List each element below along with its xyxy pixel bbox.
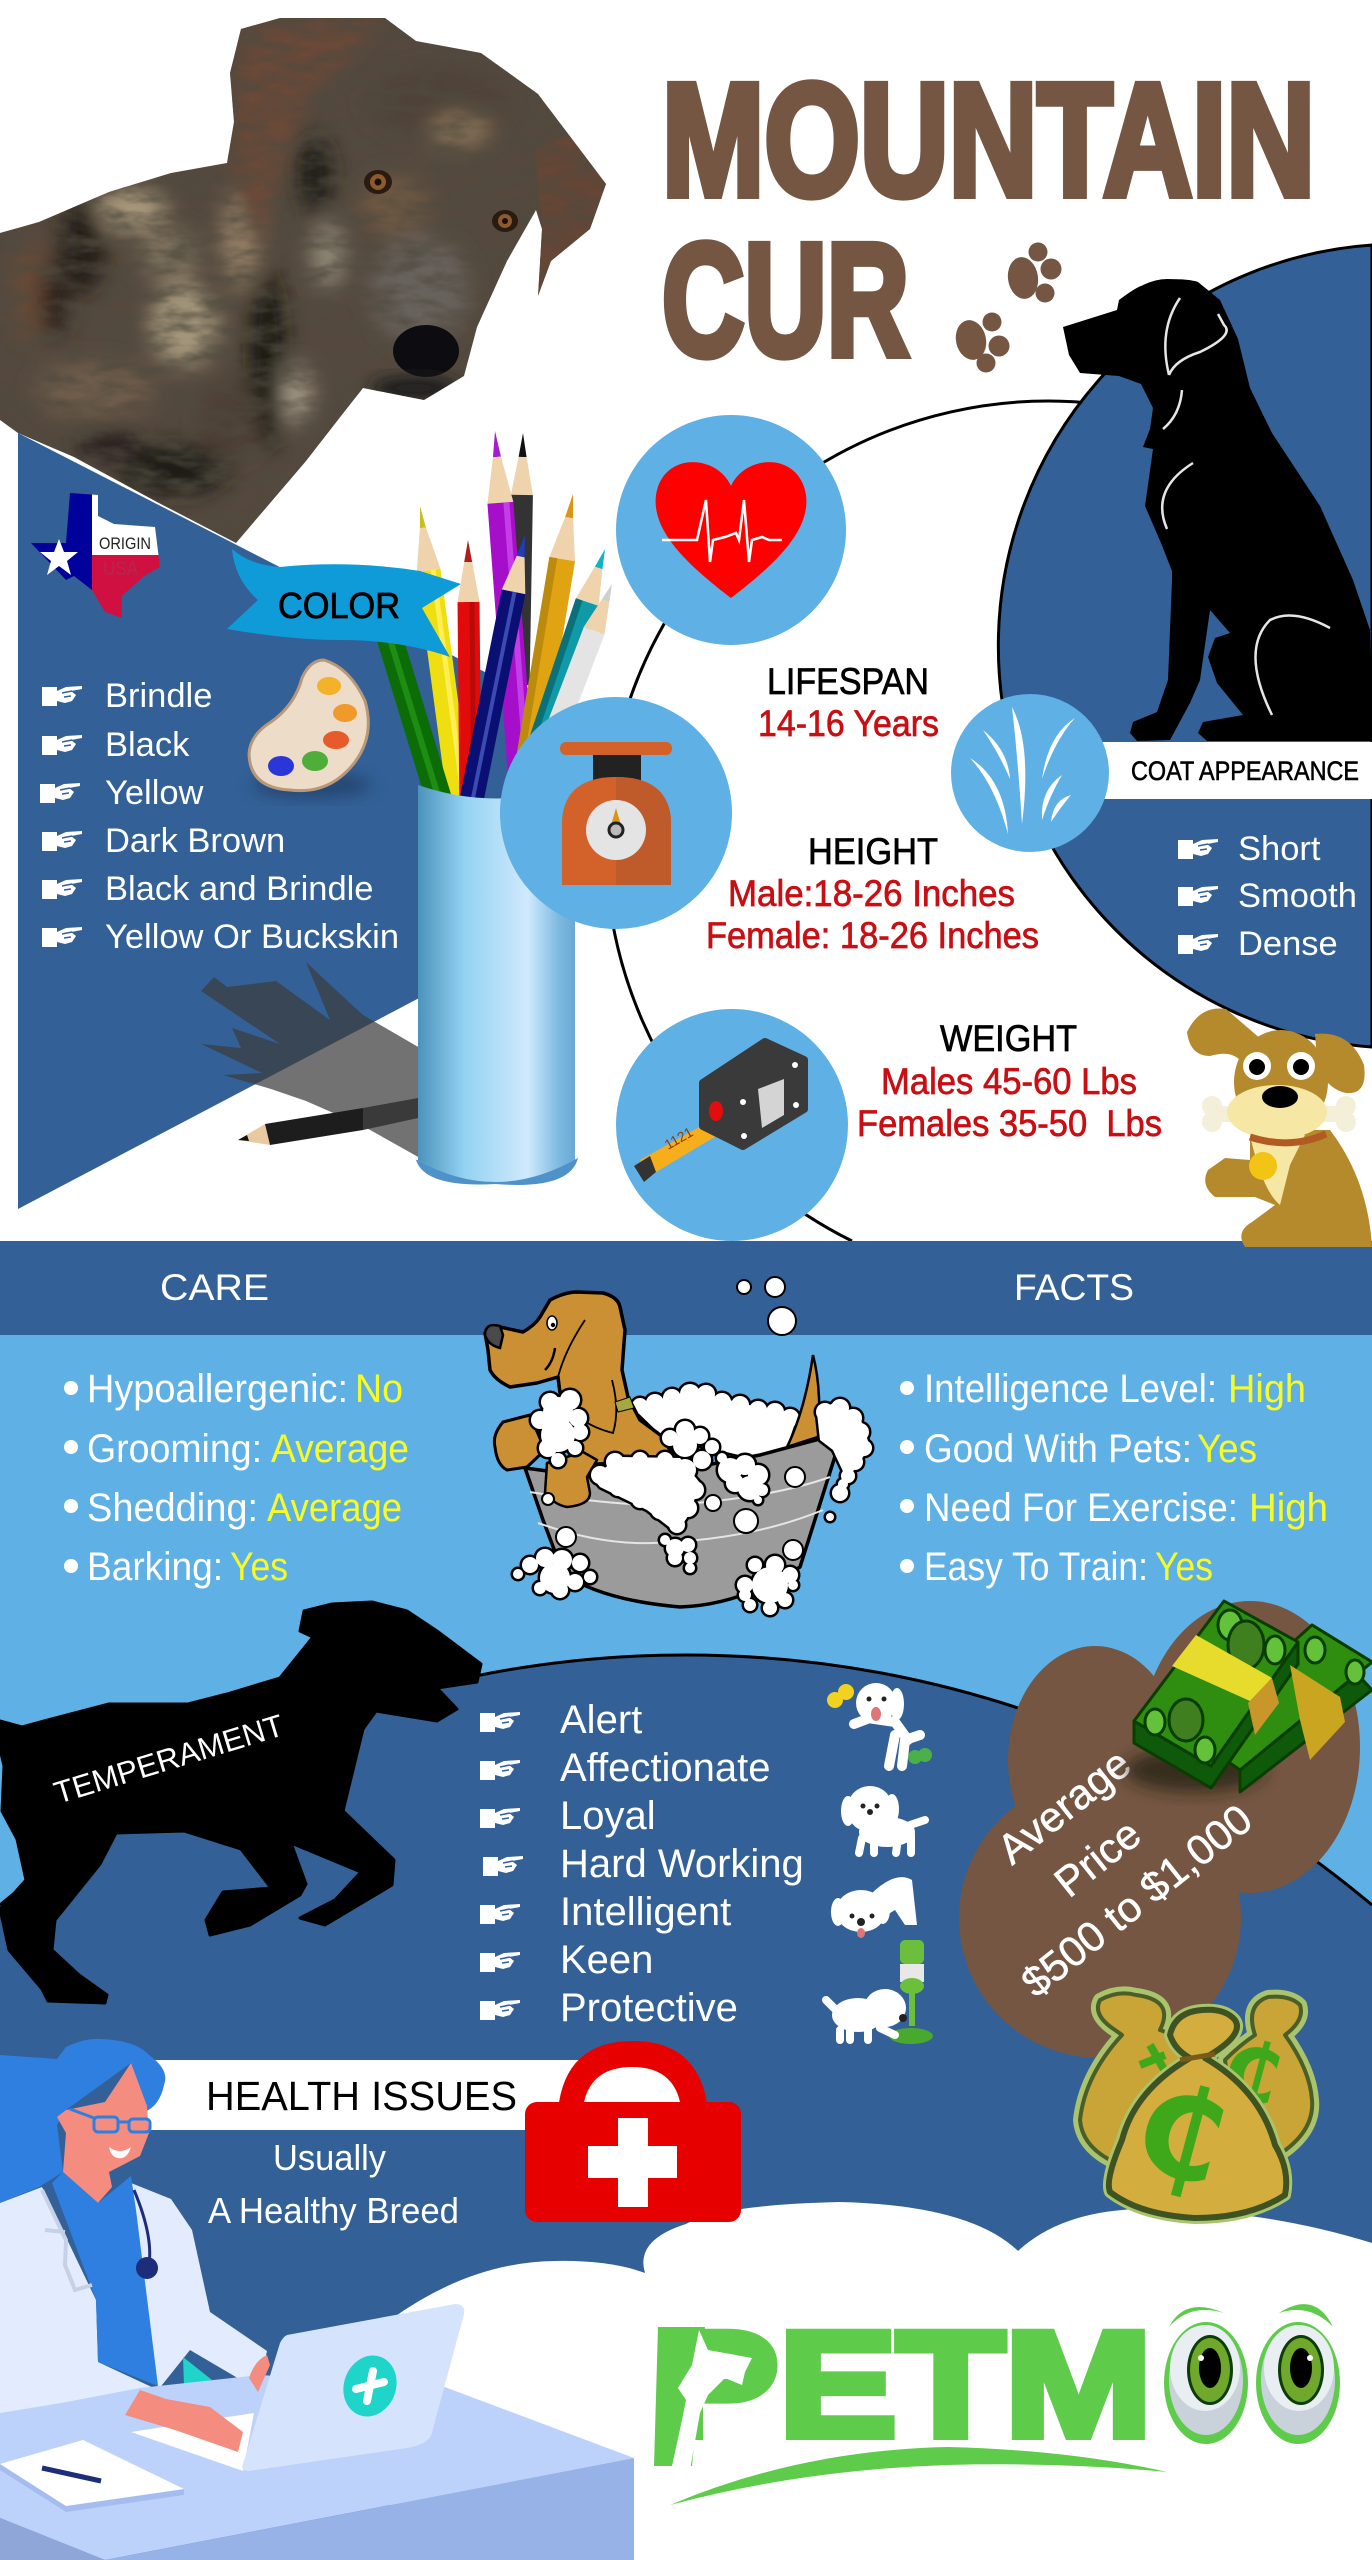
text: lifespan: 14-16 Years: [758, 703, 939, 744]
icon: heart with pulse in circle: [616, 415, 846, 645]
list: temperament traits: Affectionate: [560, 1746, 771, 1790]
list: color options: Yellow: [105, 774, 204, 812]
list: care stats: Barking:: [87, 1545, 223, 1589]
banner: health issues: HEALTH ISSUES: [206, 2073, 517, 2119]
banner: color ribbon: COLOR: [278, 585, 400, 626]
list: care stats: Yes: [230, 1545, 288, 1589]
icon: yellow pencil: [408, 504, 472, 810]
list: color options: Brindle: [105, 677, 212, 715]
panel: average price blob: Price: [1045, 1810, 1150, 1906]
icon: grass tuft in circle: [951, 694, 1109, 852]
pencil shadow: [201, 962, 420, 1158]
list: temperament traits: Intelligent: [560, 1890, 731, 1934]
list: temperament traits: [480, 1698, 804, 2030]
list: color options: [40, 677, 399, 956]
list: temperament traits: Loyal: [560, 1794, 656, 1838]
list: temperament traits: Keen: [560, 1938, 653, 1982]
icon: cash stacks: [1125, 1601, 1372, 1792]
list: facts stats: Yes: [1197, 1427, 1257, 1471]
icon: doctor with laptop at desk: [0, 2039, 634, 2560]
icon: money bags: [1080, 1993, 1312, 2218]
icon: running dog silhouette with temperament label: TEMPERAMENT: [50, 1708, 288, 1811]
icon: green pencil: [368, 605, 452, 804]
list: color options: Black and Brindle: [105, 870, 374, 908]
banner: color ribbon: [227, 549, 461, 657]
title: [662, 50, 1315, 389]
list: facts stats: Need For Exercise:: [924, 1486, 1238, 1530]
heading: facts: FACTS: [1014, 1267, 1134, 1308]
list: facts stats: Intelligence Level:: [924, 1367, 1217, 1411]
banner: health issues: [140, 2060, 590, 2130]
text: weight: Females 35-50 Lbs: [857, 1103, 1162, 1144]
text: height: Male:18-26 Inches: [728, 873, 1015, 914]
icon: weighing scale in circle: [500, 697, 732, 929]
decorative ring line linking stat circles: [606, 401, 1100, 1241]
banner: coat appearance: [1090, 742, 1372, 799]
icon: paw prints: [952, 242, 1062, 372]
list: care stats: Average: [267, 1486, 402, 1530]
list: coat traits: Smooth: [1238, 877, 1357, 915]
text: lifespan: [758, 661, 939, 744]
panel: top white background: [0, 0, 1372, 1241]
text: weight: WEIGHT: [940, 1018, 1077, 1059]
icon: first aid kit: [525, 2041, 741, 2222]
icon: pencil cup: [416, 785, 578, 1185]
panel: care and facts header band: [0, 1241, 1372, 1335]
panel: color triangle: [18, 433, 520, 1209]
icon: white puppy playing with toys: [827, 1683, 932, 1766]
title: CUR: [662, 210, 909, 389]
icon: black sitting dog silhouette: [1063, 279, 1372, 741]
list: coat traits: Dense: [1238, 925, 1338, 963]
text: health summary: [208, 2137, 459, 2231]
list: color options: Black: [105, 726, 190, 764]
icon: colored pencils group: [456, 430, 622, 820]
icon: soap bubbles: [737, 1277, 796, 1335]
icon: small black pencil: [238, 1098, 418, 1145]
list: coat traits: Short: [1238, 830, 1321, 868]
text: weight: Males 45-60 Lbs: [881, 1061, 1137, 1102]
icon: texas origin map: USA: [103, 559, 138, 580]
panel: average price blob: $500 to $1,000: [1012, 1795, 1261, 2006]
list: facts stats: Yes: [1155, 1545, 1213, 1589]
list: care stats: Shedding:: [87, 1486, 258, 1530]
list: facts stats: Easy To Train:: [924, 1545, 1148, 1589]
text: health summary: A Healthy Breed: [208, 2190, 459, 2231]
text: height: HEIGHT: [808, 831, 938, 872]
icon: texas origin map: [31, 493, 160, 618]
list: temperament traits: Alert: [560, 1698, 642, 1742]
icon: white puppy bowing: [831, 1877, 917, 1938]
icon: dog in wash tub: [485, 1292, 872, 1615]
logo: petmoo: [654, 2300, 1340, 2505]
list: facts stats: Good With Pets:: [924, 1427, 1192, 1471]
list: color options: Yellow Or Buckskin: [105, 918, 399, 956]
list: care stats: Average: [271, 1427, 409, 1471]
text: health summary: Usually: [273, 2137, 386, 2178]
list: coat traits: [1178, 830, 1357, 963]
text: lifespan: LIFESPAN: [767, 661, 929, 702]
icon: white puppy standing: [841, 1786, 925, 1853]
text: height: Female: 18-26 Inches: [706, 915, 1039, 956]
list: facts stats: High: [1228, 1367, 1306, 1411]
list: care stats: No: [355, 1367, 403, 1411]
list: care stats: Grooming:: [87, 1427, 262, 1471]
panel: average price blob: [959, 1601, 1360, 2058]
list: care stats: Hypoallergenic:: [87, 1367, 348, 1411]
heading: care: CARE: [160, 1267, 269, 1308]
icon: white puppy eating beside green feeder: [826, 1940, 933, 2044]
list: temperament traits: Protective: [560, 1986, 738, 2030]
panel: coat appearance big circle: [998, 245, 1372, 1047]
panel: average price blob: Average: [988, 1739, 1139, 1873]
icon: money bags: ₵: [1212, 2020, 1292, 2126]
icon: cartoon dog with bone: [1187, 1008, 1372, 1247]
panel: care and facts light background: [0, 1335, 1372, 2035]
list: facts stats: [900, 1367, 1328, 1589]
list: care stats: [64, 1367, 409, 1589]
icon: measuring tape in circle: [616, 1009, 848, 1241]
panel: temperament hill: [0, 1655, 1372, 2560]
panel: white cloud footer: [390, 2202, 1372, 2560]
logo: petmoo: PETM: [661, 2300, 1152, 2468]
icon: paint palette: [249, 660, 372, 798]
icon: running dog silhouette with temperament label: [0, 1602, 481, 2003]
list: facts stats: High: [1249, 1486, 1328, 1530]
icon: photo of brindle dog: [0, 0, 620, 560]
list: temperament traits: Hard Working: [560, 1842, 804, 1886]
icon: texas origin map: ORIGIN: [99, 535, 151, 553]
list: color options: Dark Brown: [105, 822, 285, 860]
icon: measuring tape in circle: 1121: [662, 1124, 696, 1153]
text: height: [706, 831, 1039, 956]
icon: money bags: ₵: [1120, 2053, 1242, 2216]
text: weight: [857, 1018, 1162, 1144]
